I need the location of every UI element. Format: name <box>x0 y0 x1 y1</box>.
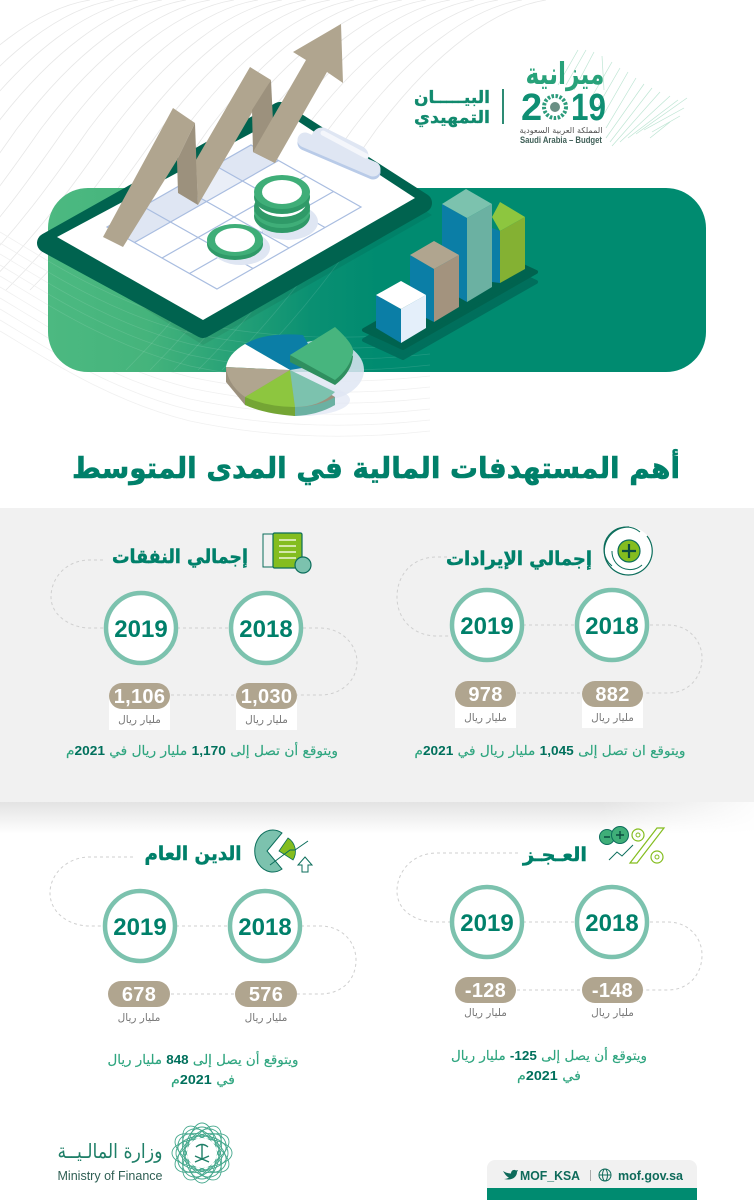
year 2019: 2019 <box>114 616 168 643</box>
ministry english name: Ministry of Finance <box>58 1169 163 1183</box>
saudi emblem <box>544 96 566 118</box>
value 2018 <box>235 981 297 1024</box>
value 2018 <box>582 681 643 728</box>
white cube <box>376 281 426 343</box>
year 2018 <box>577 887 647 957</box>
heading: إجمالي الإيرادات <box>446 548 592 570</box>
clipboard clip <box>305 133 373 172</box>
year 2019: 2019 <box>460 910 514 937</box>
pre-budget statement label: البيـــــان <box>414 88 490 108</box>
budget year: 19 <box>571 87 606 129</box>
illustration: clipboard with chart <box>47 24 432 345</box>
main title: أهم المستهدفات المالية في المدى المتوسط <box>72 449 680 485</box>
icon: twitter <box>503 1170 518 1180</box>
year 2019: 2019 <box>460 613 514 640</box>
forecast: في 2021م <box>517 1068 581 1084</box>
value 2019: -128 <box>465 980 506 1002</box>
panel: public debt <box>50 830 356 1088</box>
value 2019: 678 <box>122 984 156 1006</box>
single coin <box>207 224 270 265</box>
value 2018 <box>582 977 643 1019</box>
forecast: ويتوقع أن تصل إلى 1,170 مليار ريال في 2021م <box>66 742 338 759</box>
panel: total expenditure <box>51 533 357 759</box>
rosette emblem <box>169 1120 235 1186</box>
value 2019: مليار ريال <box>464 1007 507 1019</box>
year 2019 <box>452 590 522 660</box>
rising arrow <box>103 24 343 247</box>
ministry of finance logo <box>58 1120 235 1186</box>
connector <box>397 853 702 990</box>
connector <box>50 857 356 994</box>
value 2018: مليار ريال <box>245 714 288 726</box>
value 2018: 576 <box>249 984 283 1006</box>
forecast <box>451 1047 647 1084</box>
value 2019: مليار ريال <box>118 1012 160 1024</box>
forecast <box>108 1051 299 1088</box>
contact box <box>487 1160 697 1200</box>
tan bar <box>410 241 459 322</box>
value 2018: مليار ريال <box>245 1012 287 1024</box>
year 2019 <box>106 593 176 663</box>
value 2018 <box>236 683 297 730</box>
value 2019 <box>109 683 170 730</box>
value 2019 <box>455 681 516 728</box>
budget caption: Saudi Arabia – Budget <box>520 135 603 146</box>
pre-budget statement label: التمهيدي <box>414 108 490 128</box>
budget logo <box>520 50 687 146</box>
background wave lines <box>0 0 546 436</box>
value 2019: مليار ريال <box>118 714 161 726</box>
budget word: ميزانية <box>526 57 604 92</box>
tall teal bar <box>442 189 492 302</box>
year 2018: 2018 <box>239 616 293 643</box>
kingdom name: المملكة العربية السعودية <box>520 126 602 135</box>
budget year: 2 <box>521 87 542 129</box>
year 2018 <box>230 891 300 961</box>
heading: العـجـز <box>522 844 587 866</box>
panel: green hero band <box>48 188 706 372</box>
forecast: ويتوقع ان تصل إلى 1,045 مليار ريال في 2021م <box>414 743 686 759</box>
year 2019: 2019 <box>113 914 167 941</box>
saudi map hatching <box>558 50 687 146</box>
icon: revenue cycle <box>604 527 653 575</box>
year 2018: 2018 <box>585 910 639 937</box>
year 2018 <box>577 590 647 660</box>
forecast: في 2021م <box>171 1072 235 1088</box>
year 2019 <box>105 891 175 961</box>
value 2019 <box>455 977 516 1019</box>
icon: globe <box>599 1169 611 1181</box>
forecast: ويتوقع أن يصل إلى 125- مليار ريال <box>451 1047 647 1064</box>
ministry arabic name: وزارة المالـيــة <box>58 1139 162 1163</box>
coin stack <box>254 175 318 240</box>
value 2018: 882 <box>595 684 630 706</box>
year 2018 <box>231 593 301 663</box>
panel shadow <box>0 802 754 834</box>
budget year <box>521 87 606 129</box>
connector <box>51 560 357 695</box>
heading: إجمالي النفقات <box>112 546 248 568</box>
icon: percent <box>600 826 664 863</box>
value 2019: 978 <box>468 684 503 706</box>
grey panel background <box>0 508 754 802</box>
pre-budget statement label <box>414 88 490 128</box>
green bar <box>492 202 525 283</box>
value 2018: 1,030 <box>241 686 292 708</box>
panel: total revenue <box>397 527 702 759</box>
connector <box>397 557 702 693</box>
value 2019: 1,106 <box>114 686 165 708</box>
forecast: ويتوقع أن يصل إلى 848 مليار ريال <box>108 1051 299 1068</box>
twitter handle: MOF_KSA <box>520 1168 581 1183</box>
clipboard grid <box>107 145 361 289</box>
heading: الدين العام <box>144 843 242 865</box>
pie chart illustration <box>226 327 364 416</box>
value 2018: مليار ريال <box>591 712 634 724</box>
clipboard board <box>47 112 432 345</box>
icon: document <box>263 533 311 573</box>
band line overlay <box>48 260 430 372</box>
pie slices <box>226 334 335 407</box>
year 2018: 2018 <box>238 914 292 941</box>
icon: debt pie <box>255 830 312 872</box>
panel: deficit <box>397 826 702 1084</box>
bar chart illustration <box>364 189 536 358</box>
year 2019 <box>452 887 522 957</box>
value 2019 <box>108 981 170 1024</box>
year 2018: 2018 <box>585 613 639 640</box>
value 2018: -148 <box>592 980 633 1002</box>
detached slice <box>290 327 353 385</box>
logo divider <box>502 89 504 124</box>
value 2018: مليار ريال <box>591 1007 634 1019</box>
value 2019: مليار ريال <box>464 712 507 724</box>
website: mof.gov.sa <box>618 1168 684 1183</box>
